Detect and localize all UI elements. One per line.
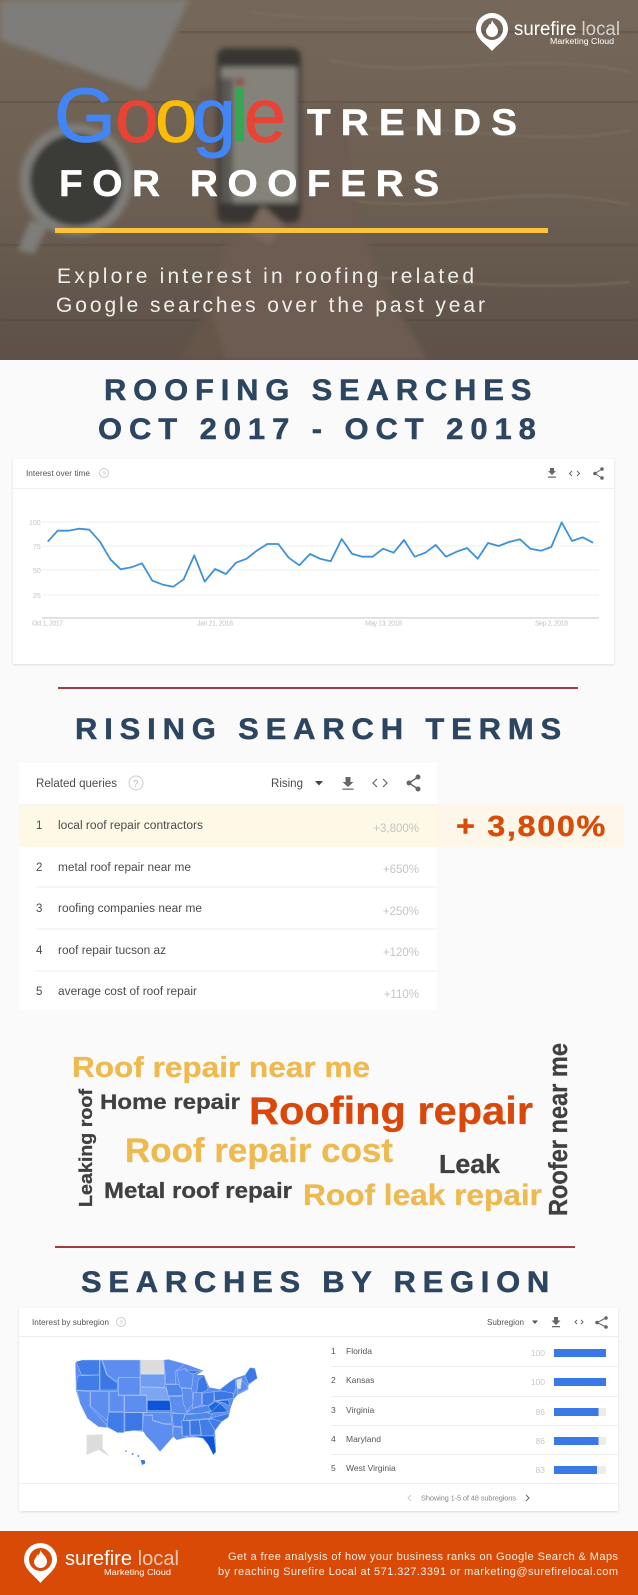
icon: code [575,1320,583,1324]
table rows: +250% [383,906,419,918]
heading: roofing searches [98,375,536,446]
table rows: roofing companies near me [58,903,202,915]
heading: roofing searches: OCT 2017 - OCT 2018 [98,414,536,446]
google logo: g [192,73,236,159]
word cloud: Roof repair cost [125,1132,393,1170]
line chart [29,520,599,628]
call to action text: Get a free analysis of how your business ranks on Google Search & Maps [228,1551,618,1563]
table: top subregions: 1 [331,1346,336,1356]
icon: help: ? [102,471,106,478]
table rows: roof repair tucson az [58,945,166,957]
panel title: Interest over time [26,468,90,478]
table: top subregions: 100 [531,1377,545,1387]
table: top subregions: 86 [536,1436,545,1446]
line chart: Sep 2, 2018 [535,620,568,628]
table: top subregions: Maryland [346,1434,381,1444]
table: top subregions: 2 [331,1375,336,1385]
laptop [0,0,189,90]
line chart: 100 [29,520,41,527]
table: top subregions: Virginia [346,1405,374,1415]
heading: searches by region: SEARCHES BY REGION [81,1267,549,1299]
pagination: Showing 1-5 of 48 subregions [421,1494,516,1502]
word cloud: Leaking roof [75,1088,96,1207]
icon: help: ? [133,779,139,790]
table rows: 3 [36,903,42,915]
panel: related queries: Rising [271,778,303,790]
table rows: +110% [384,989,419,1001]
map: united states [75,1359,257,1465]
icon: share [406,774,420,792]
word cloud: Roof leak repair [303,1179,542,1212]
title: TRENDS [307,103,517,144]
table rows: 2 [36,862,42,874]
logo: surefire local: surefire local [514,19,620,40]
google logo: o [115,73,159,159]
hero header [0,0,638,360]
bars [554,1349,606,1474]
icon: download [548,468,556,478]
table rows: average cost of roof repair [58,986,197,998]
table: top subregions: 5 [331,1463,336,1473]
table: top subregions: Kansas [346,1375,374,1385]
panel: interest over time [13,459,614,664]
panel title: Interest by subregion [32,1317,109,1327]
footer [0,1531,638,1595]
word cloud: Roof repair near me [72,1052,370,1084]
table rows: 1 [36,820,42,832]
line chart: May 13, 2018 [365,620,402,628]
heading: rising search terms: RISING SEARCH TERMS [75,714,561,746]
table rows: metal roof repair near me [58,862,191,874]
icon: help [100,468,108,478]
map silhouette [75,1359,257,1455]
table rows: 4 [36,945,43,957]
title: FOR ROOFERS [59,164,439,205]
table: top subregions: 4 [331,1434,336,1444]
logo: surefire local: Marketing Cloud [104,1567,171,1577]
panel: interest by subregion [19,1308,618,1511]
google logo: o [155,73,197,159]
table rows: local roof repair contractors [58,820,203,832]
table rows [36,820,419,1001]
line chart: 50 [33,568,41,575]
table rows: +650% [383,864,419,876]
google logo [54,73,286,159]
word cloud: Leak [439,1151,501,1179]
table: top subregions: 3 [331,1405,336,1415]
call to action text [218,1551,618,1578]
subtitle: Google searches over the past year [56,294,485,317]
icon: share [593,467,604,480]
word cloud: Roofer near me [545,1043,573,1216]
coffee mug [18,220,48,254]
table rows: +3,800% [373,823,419,835]
hands [203,100,428,360]
subtitle: Explore interest in roofing related [57,265,474,288]
word cloud [72,1043,573,1216]
table: top subregions: West Virginia [346,1463,396,1473]
icon: code [373,779,387,787]
icon: download [552,1317,560,1327]
logo: surefire local [476,13,620,51]
logo: surefire local [24,1543,179,1583]
line chart: Jan 21, 2018 [197,620,233,628]
google logo: e [244,73,286,159]
table: top subregions: 100 [531,1348,545,1358]
line chart: 25 [33,593,41,600]
yellow rule [55,228,548,233]
subtitle [56,265,485,317]
icon: code [570,471,580,476]
icon: dropdown [532,1320,538,1324]
hero background photo [0,0,638,360]
table: top subregions: 83 [536,1465,545,1475]
word cloud: Home repair [100,1090,241,1114]
heading: roofing searches: ROOFING SEARCHES [104,375,531,407]
logo: surefire local: Marketing Cloud [550,37,614,46]
word cloud: Roofing repair [249,1090,533,1133]
icon: help: ? [119,1320,123,1327]
call to action text: by reaching Surefire Local at 571.327.3391 or marketing@surefirelocal.com [218,1566,618,1578]
icon: location pin [24,1543,57,1583]
logo: surefire local: surefire local [65,1548,179,1570]
highlight row [19,804,624,847]
panel title: Related queries [36,778,117,790]
panel: interest by subregion: Subregion [487,1317,524,1327]
icon: dropdown [315,781,323,786]
table: top subregions: Florida [346,1346,372,1356]
table rows: +120% [383,947,419,959]
icon: help [129,776,143,790]
line chart: 75 [33,544,41,551]
phone [217,48,301,223]
icon: download [342,777,354,790]
icon: help [116,1318,126,1327]
line chart: Oct 1, 2017 [32,620,63,628]
table rows: 5 [36,986,42,998]
title [59,103,517,205]
icon: share [595,1316,608,1329]
table: top subregions: 86 [536,1407,545,1417]
icon: location pin [476,13,508,51]
table: top subregions [331,1346,618,1475]
word cloud: Metal roof repair [104,1178,292,1203]
callout: +3,800%: + 3,800% [456,811,607,843]
google logo: G [54,73,116,159]
panel: related queries [19,763,624,1010]
